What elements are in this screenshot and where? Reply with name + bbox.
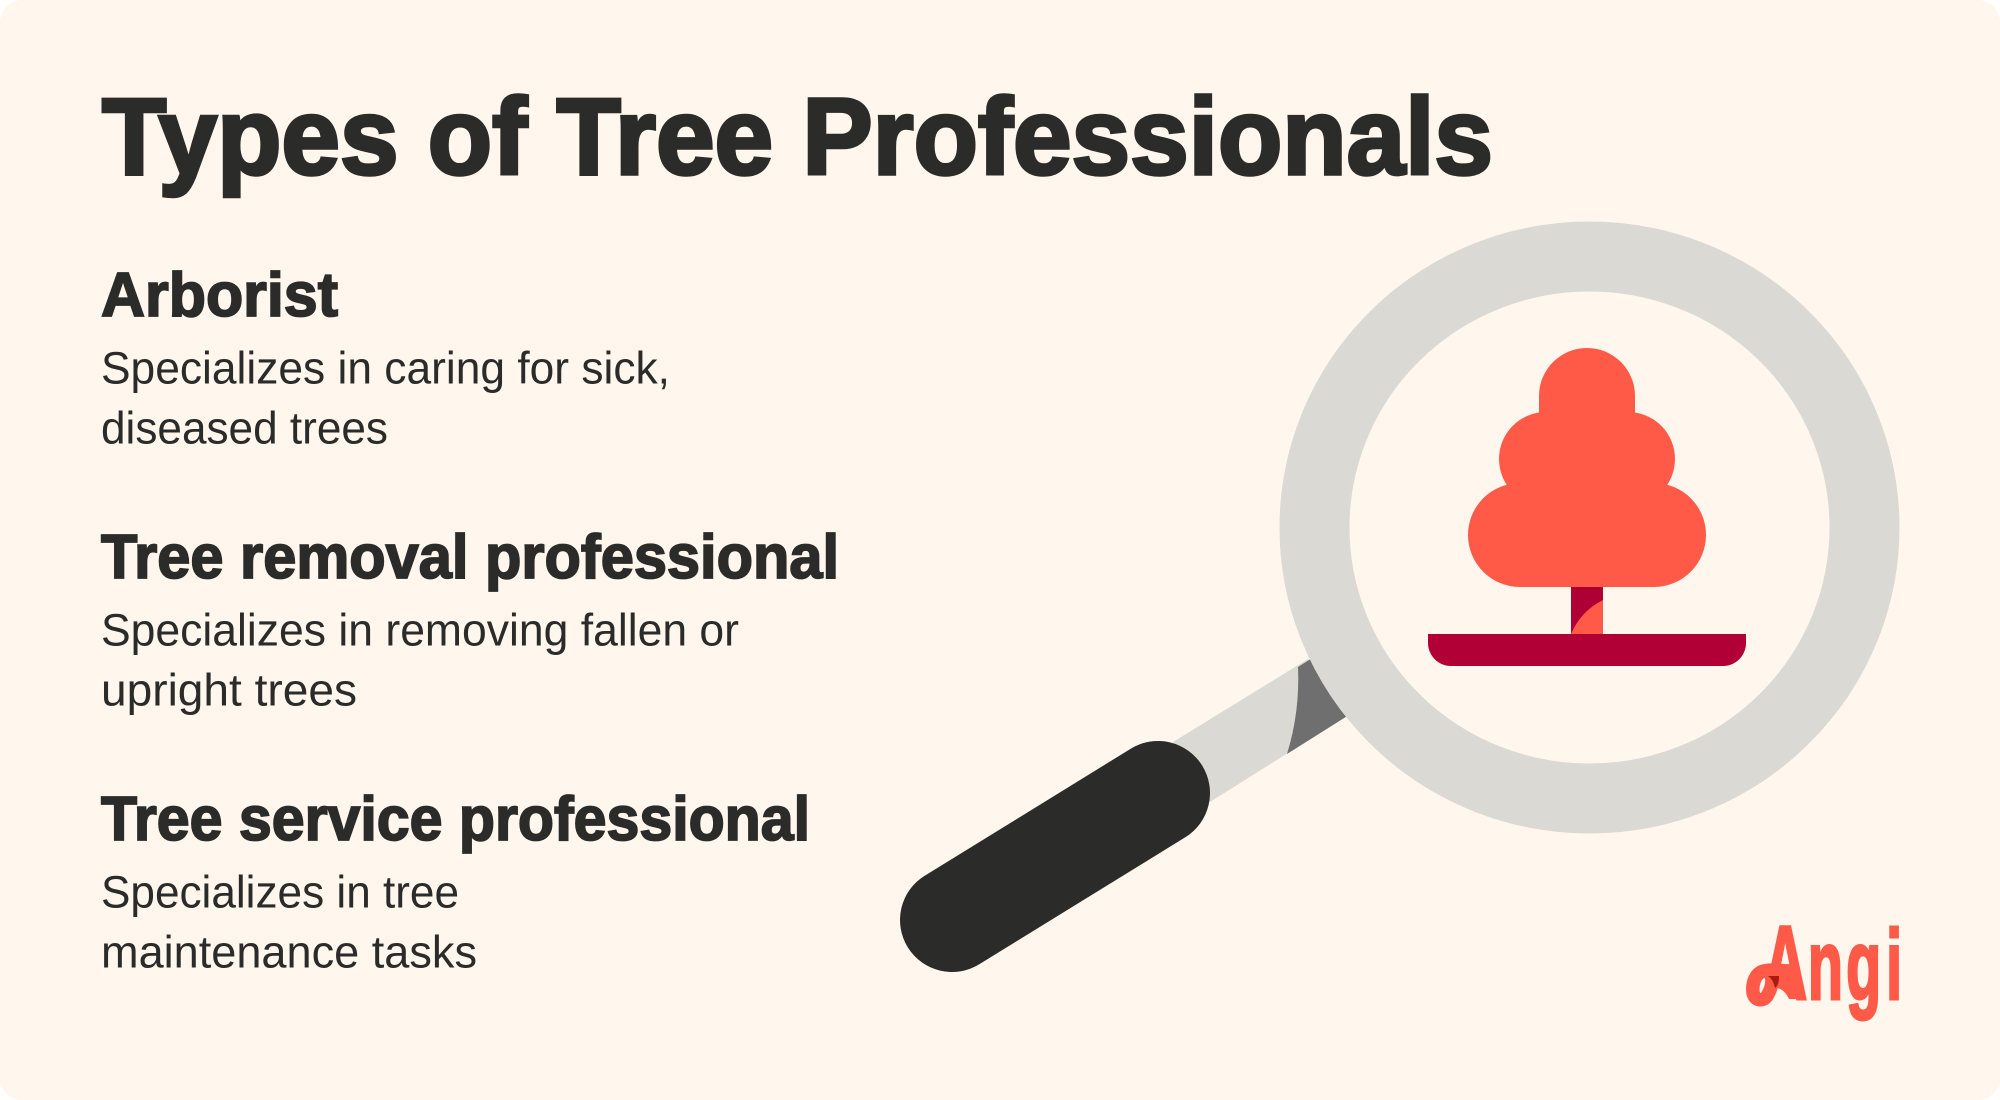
- logo wordmark: A: [1763, 905, 1807, 1022]
- magnifier shaft shadow: [1287, 653, 1360, 754]
- text: tree removal description: Specializes in removing fallen or: [101, 604, 739, 656]
- icon: tree: [1428, 348, 1746, 666]
- logo leg cover: [1758, 978, 1790, 1002]
- magnifier handle: [952, 793, 1158, 920]
- tree canopy: [1468, 348, 1706, 587]
- text: arborist description: Specializes in caring for sick,: [101, 342, 670, 394]
- section: tree removal professional: [101, 523, 839, 716]
- text: tree service description: maintenance tasks: [101, 926, 477, 978]
- heading: arborist: Arborist: [101, 261, 338, 330]
- magnifier lens ring: [1314, 256, 1864, 798]
- text: tree service description: Specializes in tree: [101, 866, 459, 918]
- title: Types of Tree Professionals: [102, 76, 1493, 198]
- logo wordmark: i: [1886, 911, 1902, 1021]
- section: arborist: [101, 261, 670, 454]
- logo loop: [1753, 970, 1795, 1000]
- text: tree removal description: upright trees: [101, 664, 357, 716]
- heading: tree service professional: Tree service professional: [101, 785, 810, 854]
- magnifier shaft: [1173, 659, 1345, 802]
- logo wordmark: g: [1846, 911, 1881, 1021]
- logo crossbar and foot: [1772, 966, 1806, 999]
- tree trunk: [1571, 587, 1603, 634]
- section: tree service professional: [101, 785, 810, 978]
- text: arborist description: diseased trees: [101, 402, 388, 454]
- heading: tree removal professional: Tree removal professional: [101, 523, 839, 592]
- trunk highlight: [1571, 600, 1603, 634]
- logo loop accent: [1768, 976, 1779, 988]
- logo wordmark: n: [1808, 911, 1843, 1021]
- icon: magnifying glass: [952, 256, 1864, 920]
- logo: Angi: [1753, 905, 1902, 1022]
- ground: [1428, 634, 1746, 666]
